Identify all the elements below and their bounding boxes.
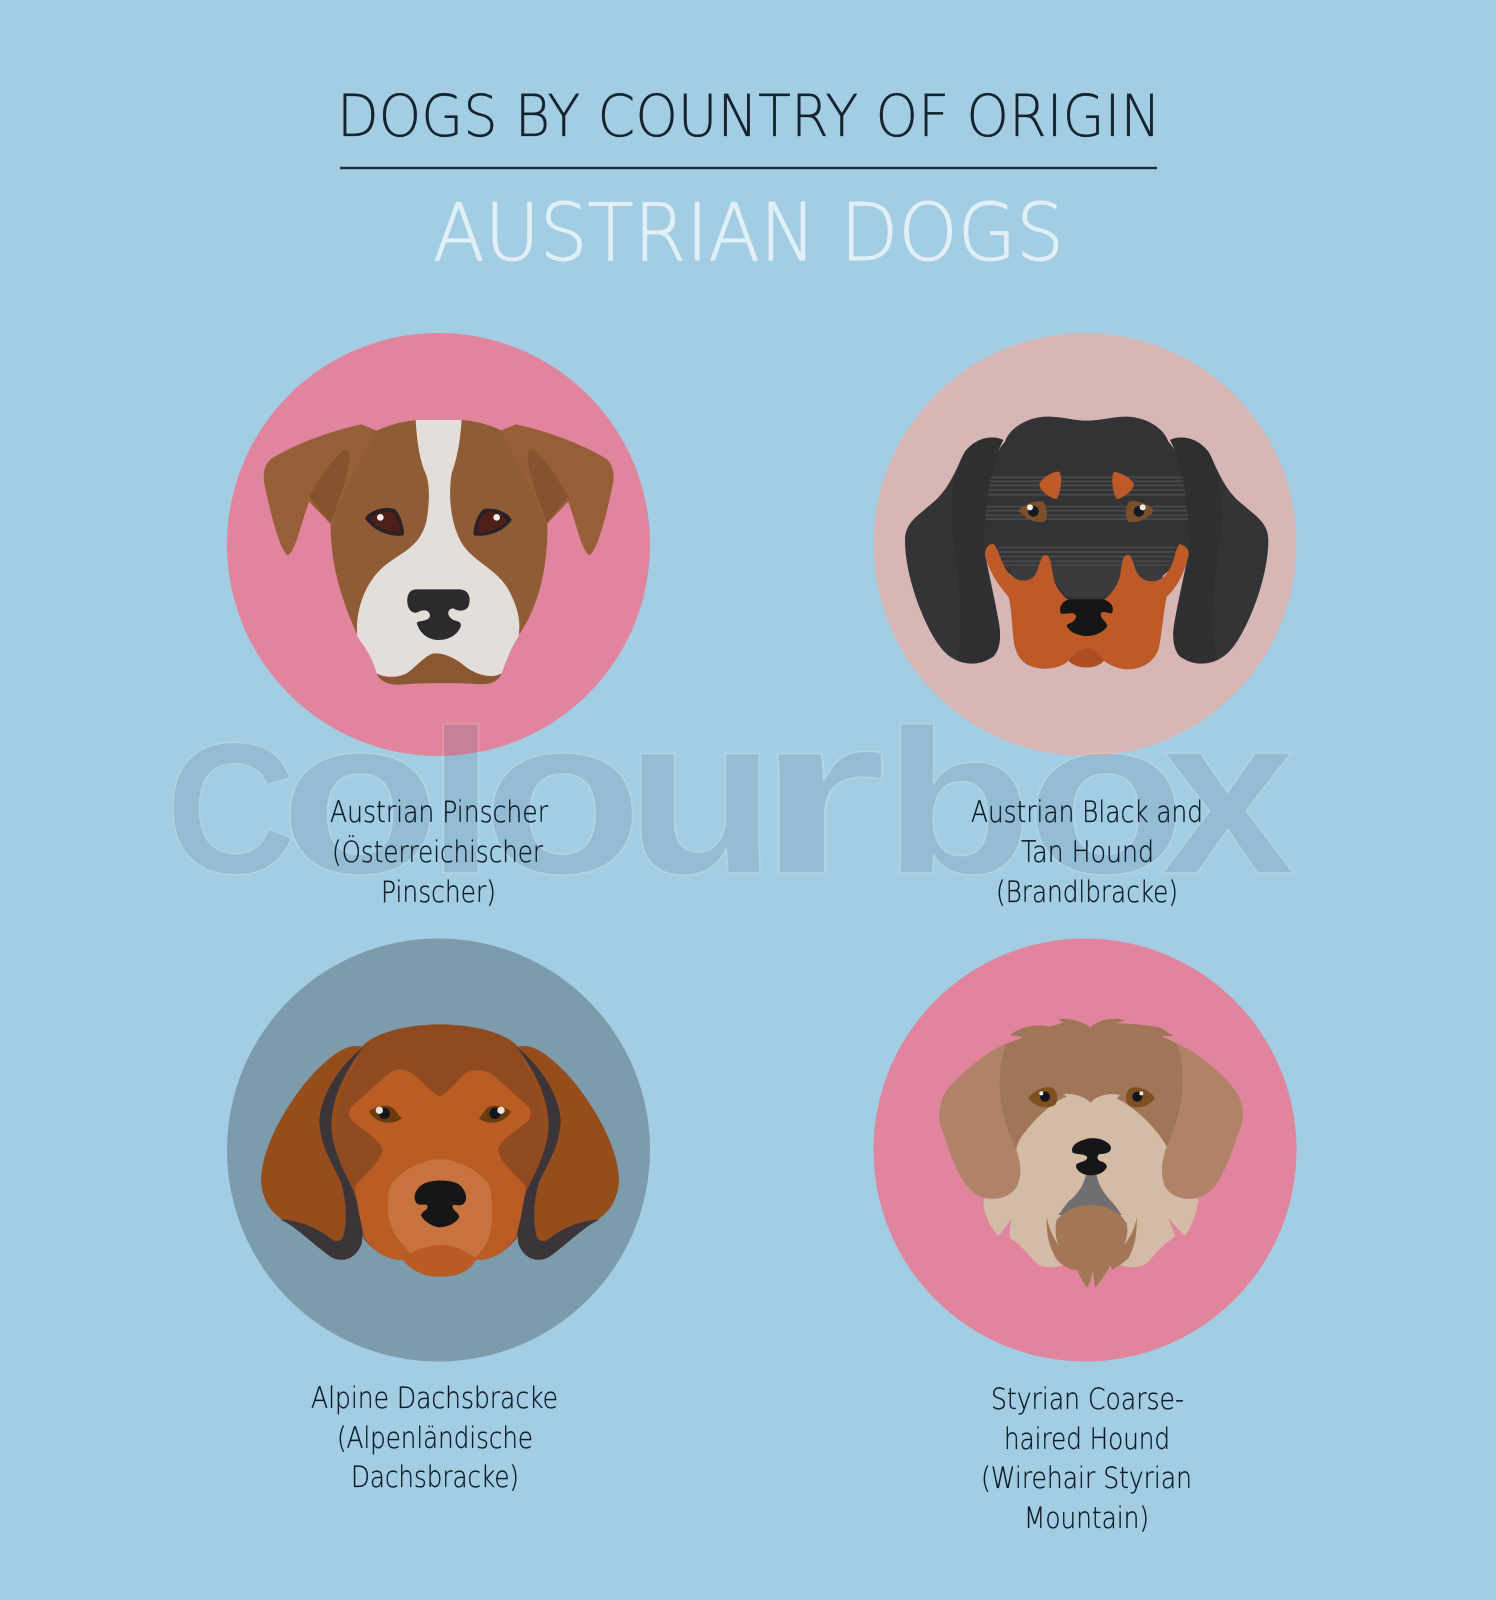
- icon: Styrian Coarse-haired Hound dog face: [939, 1019, 1243, 1287]
- label: Alpine Dachsbracke: (Alpenländische: [337, 1421, 533, 1455]
- subtitle: AUSTRIAN DOGS: [433, 187, 1064, 279]
- label: Styrian Coarse-haired Hound: haired Hound: [1004, 1422, 1170, 1456]
- panel: Austrian Black and Tan Hound portrait: [874, 333, 1296, 756]
- label: Austrian Black and Tan Hound: Tan Hound: [1021, 835, 1154, 869]
- watermark: Colourbox: o: [482, 671, 643, 920]
- panel: Styrian Coarse-haired Hound portrait: [874, 938, 1296, 1362]
- label: Styrian Coarse-haired Hound: Mountain): [1024, 1501, 1149, 1535]
- label: Styrian Coarse-haired Hound: [981, 1382, 1192, 1535]
- label: Austrian Black and Tan Hound: Austrian Black and: [971, 795, 1203, 829]
- label: Alpine Dachsbracke: Dachsbracke): [351, 1460, 519, 1494]
- label: Austrian Pinscher: Austrian Pinscher: [330, 795, 548, 829]
- panel: Austrian Pinscher portrait: [227, 333, 650, 756]
- watermark: Colourbox: l: [425, 687, 497, 917]
- label: Austrian Pinscher: Pinscher): [381, 875, 496, 909]
- icon: Austrian Pinscher dog face: [264, 420, 614, 685]
- icon: Alpine Dachsbracke dog face: [261, 1024, 619, 1277]
- watermark: Colourbox: o: [1025, 671, 1187, 920]
- watermark: Colourbox: r: [755, 669, 887, 922]
- watermark: Colourbox: b: [883, 686, 1033, 917]
- panel: Alpine Dachsbracke portrait: [227, 938, 650, 1362]
- label: Austrian Black and Tan Hound: [971, 795, 1203, 909]
- watermark: Colourbox: x: [1161, 668, 1295, 921]
- label: Styrian Coarse-haired Hound: (Wirehair Styrian: [981, 1461, 1192, 1495]
- label: Alpine Dachsbracke: [311, 1381, 558, 1494]
- watermark: Colourbox: o: [279, 671, 441, 920]
- label: Styrian Coarse-haired Hound: Styrian Coarse-: [991, 1382, 1184, 1416]
- label: Austrian Black and Tan Hound: (Brandlbracke): [996, 875, 1178, 909]
- watermark: Colourbox: C: [166, 703, 296, 913]
- label: Austrian Pinscher: (Österreichischer: [332, 835, 543, 869]
- label: Alpine Dachsbracke: Alpine Dachsbracke: [311, 1381, 558, 1415]
- label: Austrian Pinscher: [330, 795, 548, 909]
- watermark: Colourbox: u: [625, 669, 777, 922]
- icon: Austrian Black and Tan Hound dog face: [905, 417, 1268, 669]
- watermark: Colourbox: [166, 668, 1295, 922]
- title: DOGS BY COUNTRY OF ORIGIN: [337, 82, 1161, 150]
